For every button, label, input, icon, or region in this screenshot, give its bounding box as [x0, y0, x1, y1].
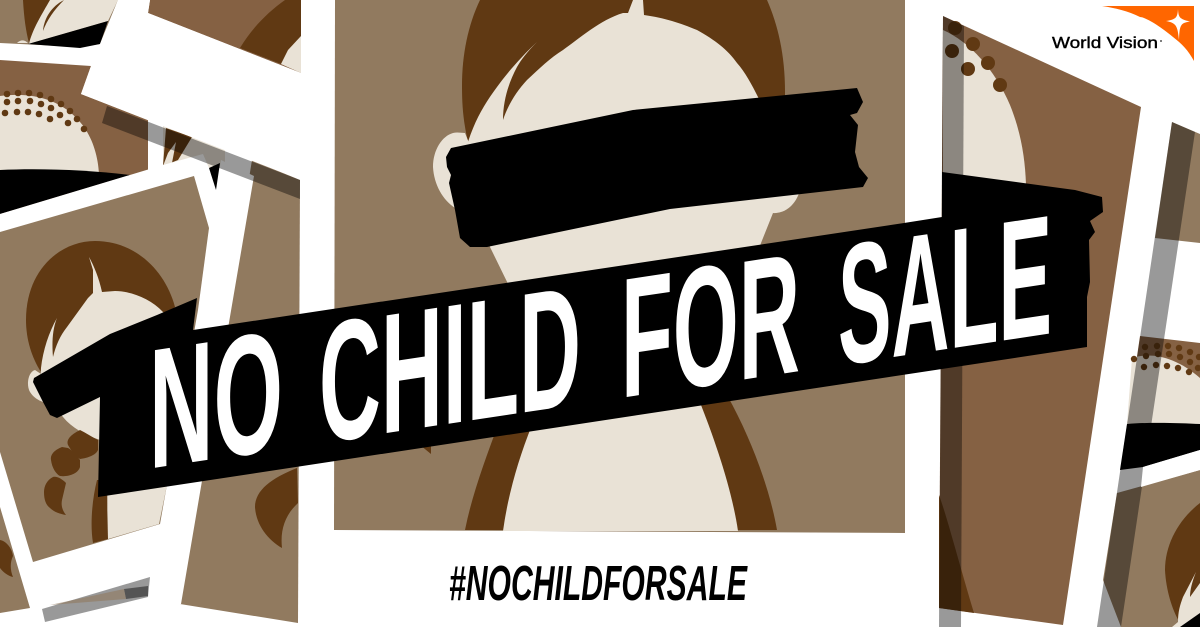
photo frame: left polaroid white border — [0, 154, 254, 627]
fragment: face glimpsed between frames — [163, 120, 225, 168]
headscarf dots — [2, 90, 87, 132]
photo: top-left child with dotted headscarf — [0, 60, 148, 214]
dots — [1131, 343, 1200, 375]
stray hair tip — [420, 445, 431, 454]
right ear — [770, 180, 800, 213]
chest — [503, 400, 738, 531]
ear — [28, 370, 50, 402]
logo orange corner — [1102, 6, 1194, 61]
dots — [945, 21, 1007, 92]
photo: tall tan portrait behind left photo — [180, 160, 300, 623]
neck and chest — [107, 480, 168, 539]
banner slogan: FOR — [621, 217, 800, 435]
shadow: under the top white frame — [102, 106, 300, 199]
icon: small black tape tip — [209, 163, 220, 190]
hair strand — [92, 480, 108, 543]
left ear — [433, 133, 480, 208]
black tape over central child's eyes — [446, 88, 868, 247]
photo: bottom-left corner fragment — [0, 507, 30, 613]
photo: central polaroid — [301, 0, 942, 627]
photo: far right lower portrait — [1103, 470, 1200, 627]
hashtag: #NOCHILDFORSALE — [449, 557, 748, 611]
photo: far right child with dots — [1120, 336, 1200, 470]
photo: top-left child portrait fragment — [0, 0, 118, 48]
black banner with slogan — [33, 172, 1103, 505]
logo wordmark: World Vision — [1052, 35, 1158, 52]
banner slogan: NO — [149, 294, 283, 505]
photo: right child with dotted headscarf — [939, 16, 1141, 625]
hair — [462, 0, 785, 142]
banner slogan: CHILD — [319, 250, 581, 480]
logo: World Vision — [1052, 6, 1194, 61]
hair — [26, 241, 175, 380]
logo star — [1166, 9, 1190, 40]
face — [40, 257, 200, 440]
shadow: slanted strip on far right — [1097, 122, 1195, 627]
banner slogan — [149, 179, 1052, 505]
white frame gap restoring band — [1141, 450, 1200, 487]
photo: top centre-left child portrait fragment — [148, 0, 301, 73]
face — [468, 0, 782, 290]
logo registered mark — [1160, 40, 1162, 42]
shadow: tape strip on bottom-left — [42, 577, 150, 622]
shoulders — [465, 395, 777, 530]
photo frame: top polaroid white border — [81, 0, 301, 180]
photo: left child with braids — [0, 176, 209, 562]
shadow: vertical strip on right photo — [939, 16, 964, 627]
photo: far right upper portrait — [1155, 122, 1200, 243]
braids — [68, 430, 98, 459]
